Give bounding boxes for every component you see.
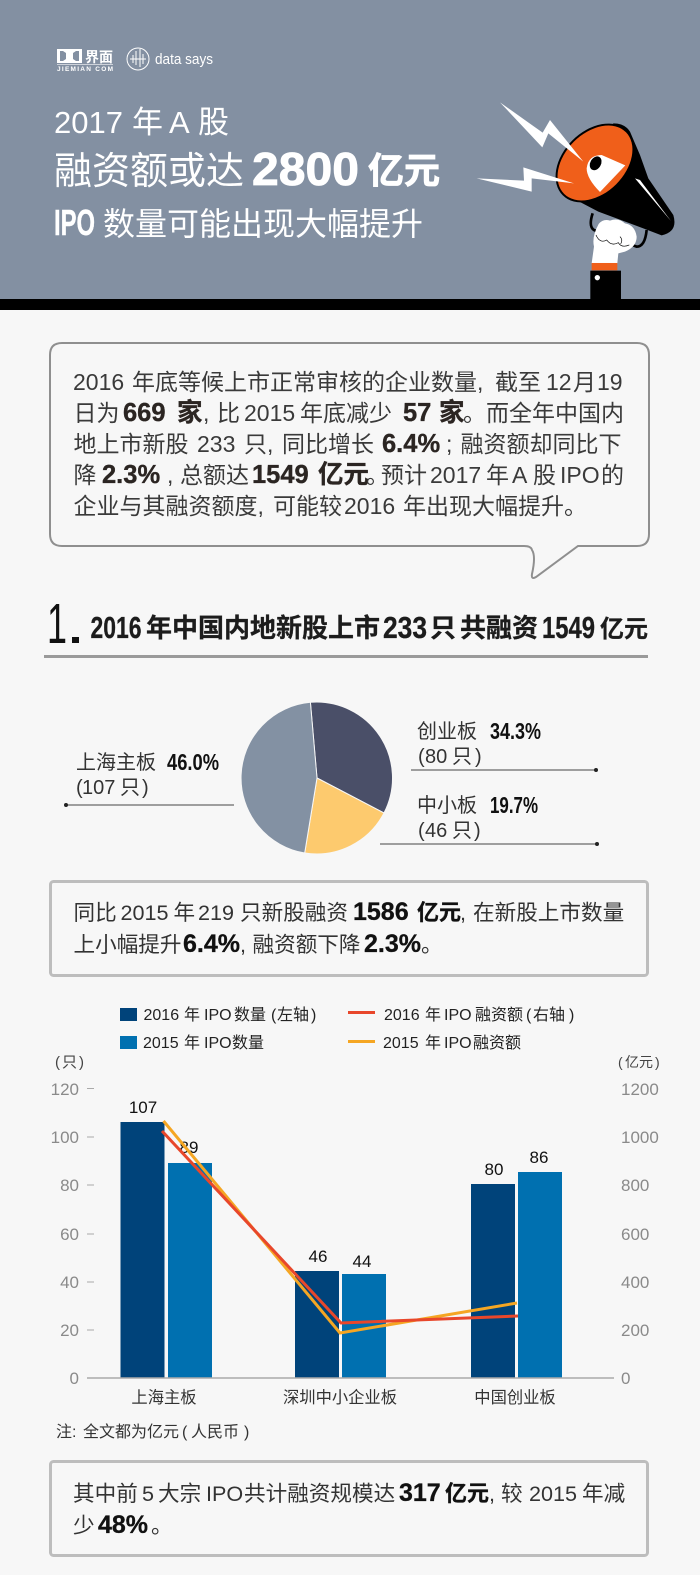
callout: 2015 comparison xyxy=(50,882,648,976)
chart legend: 2016 xyxy=(384,1007,420,1024)
callout: intro speech bubble: , xyxy=(167,462,173,488)
chart legend: IPO xyxy=(204,1035,232,1052)
callout: top 5 IPOs: 317 xyxy=(399,1479,441,1507)
callout: intro speech bubble: 的 xyxy=(601,462,624,488)
right axis: ( xyxy=(618,1054,623,1070)
chart legend: 年 xyxy=(425,1034,441,1052)
callout: intro speech bubble: 股 xyxy=(533,462,556,488)
line: 2016 financing xyxy=(162,1131,518,1323)
callout: intro speech bubble: 12 xyxy=(546,369,572,395)
callout: 2015 comparison: 同比 xyxy=(74,900,117,925)
callout: intro speech bubble: ; xyxy=(446,431,452,457)
callout: 2015 comparison: 219 xyxy=(198,900,234,925)
bar value labels xyxy=(129,1098,548,1271)
callout: intro speech bubble: 家 xyxy=(177,399,203,427)
chart legend: 右轴 xyxy=(533,1006,565,1024)
left axis: 100 xyxy=(51,1128,79,1147)
pie label: 上海主板: 只 xyxy=(120,777,140,799)
right axis: 600 xyxy=(621,1225,649,1244)
callout: intro speech bubble: 截至 xyxy=(495,369,541,395)
bar value labels: 80 xyxy=(485,1160,503,1179)
slice: 上海主板 xyxy=(241,702,317,853)
title: 股 xyxy=(198,105,229,140)
bar value labels: 89 xyxy=(180,1138,198,1157)
logo: data says xyxy=(127,48,213,70)
footnote: ( xyxy=(182,1424,188,1441)
pie label: 创业板: 创业板 xyxy=(417,720,477,743)
left axis: 0 xyxy=(70,1369,79,1388)
category labels xyxy=(131,1389,556,1407)
heading: section 1: 只 xyxy=(430,613,456,643)
chart legend: ( xyxy=(526,1007,532,1024)
callout: intro speech bubble: 年 xyxy=(486,462,509,488)
callout: intro speech bubble: 6.4% xyxy=(382,430,440,458)
header banner xyxy=(0,0,700,310)
callout: 2015 comparison: 2.3% xyxy=(364,930,421,958)
callout: top 5 IPOs: 。 xyxy=(151,1513,173,1538)
callout: top 5 IPOs: 其中前 xyxy=(73,1481,138,1506)
callout: intro speech bubble: 2.3% xyxy=(102,461,160,489)
title: IPO xyxy=(54,202,95,243)
right axis: ) xyxy=(655,1054,660,1070)
left axis: 80 xyxy=(60,1176,79,1195)
callout: intro speech bubble: 亿元 xyxy=(318,461,369,489)
footnote: ) xyxy=(244,1424,249,1441)
icon: lightning bolts xyxy=(477,102,583,192)
title: 融资额或达 xyxy=(54,151,244,193)
line: 2015 financing xyxy=(164,1121,517,1333)
callout: top 5 IPOs: , xyxy=(489,1481,495,1506)
pie label: 中小板: 只 xyxy=(452,820,472,842)
pie label: 创业板: ( xyxy=(418,746,425,768)
chart legend: 数量 xyxy=(232,1034,264,1052)
pie label: 上海主板: ) xyxy=(142,777,149,799)
chart legend: 年 xyxy=(184,1006,200,1024)
pie label: 上海主板 xyxy=(64,749,234,807)
callout: intro speech bubble: IPO xyxy=(560,462,600,488)
heading: section 1: 1 xyxy=(47,592,67,656)
pie label: 创业板 xyxy=(411,718,598,772)
callout: intro speech bubble: 可能较 xyxy=(273,493,342,519)
callout: intro speech bubble: 融资额却同比下 xyxy=(460,431,622,457)
callout: intro speech bubble: 2017 xyxy=(430,462,481,488)
right axis: 0 xyxy=(621,1369,630,1388)
right axis: 1200 xyxy=(621,1080,659,1099)
callout: 2015 comparison: 亿元 xyxy=(417,900,461,925)
callout: intro speech bubble: 比 xyxy=(217,400,240,426)
chart legend: ( xyxy=(271,1007,277,1024)
callout: top 5 IPOs: 大宗 xyxy=(158,1481,201,1506)
pie label: 中小板: 46 xyxy=(425,820,447,842)
chart legend: 2015 xyxy=(143,1035,179,1052)
callout: intro speech bubble: 年底减少 xyxy=(300,400,392,426)
heading: section 1: 2016 xyxy=(90,610,142,645)
bars xyxy=(120,1122,562,1378)
callout: top 5 IPOs xyxy=(50,1462,648,1556)
pie label: 中小板: ( xyxy=(418,820,425,842)
callout: intro speech bubble: 1549 xyxy=(252,461,309,489)
chart legend xyxy=(120,1006,574,1052)
callout: 2015 comparison: 融资额下降 xyxy=(252,932,360,957)
chart legend: ) xyxy=(569,1007,574,1024)
title: 2017 xyxy=(54,105,123,140)
heading: section 1: 233 xyxy=(383,610,427,645)
callout: intro speech bubble: 降 xyxy=(74,462,96,488)
callout: top 5 IPOs: 年减 xyxy=(582,1481,625,1506)
chart legend: IPO xyxy=(204,1007,232,1024)
callout: intro speech bubble: 企业与其融资额度, xyxy=(74,493,264,519)
callout: top 5 IPOs: 亿元 xyxy=(445,1481,489,1506)
right axis: 200 xyxy=(621,1321,649,1340)
right axis: 1000 xyxy=(621,1128,659,1147)
pie label: 中小板: 中小板 xyxy=(417,794,477,817)
callout: intro speech bubble: 年底等候上市正常审核的企业数量, xyxy=(132,369,483,395)
pie label: 创业板: 只 xyxy=(452,746,472,768)
right axis: 400 xyxy=(621,1273,649,1292)
pie chart xyxy=(241,702,393,854)
callout: intro speech bubble: 日为 xyxy=(74,400,120,426)
chart legend: 2016 xyxy=(144,1007,179,1024)
callout: intro speech bubble: 同比增长 xyxy=(282,431,374,457)
left axis xyxy=(51,1054,94,1388)
callout: intro speech bubble: 233 xyxy=(197,431,235,457)
callout: intro speech bubble: 地上市新股 xyxy=(74,431,188,457)
icon: megaphone with fist xyxy=(477,102,674,300)
category labels: 上海主板 xyxy=(131,1389,197,1407)
callout: 2015 comparison: , xyxy=(460,900,466,925)
callout: 2015 comparison: 上小幅提升 xyxy=(74,932,181,957)
callout: top 5 IPOs: 5 xyxy=(142,1481,154,1506)
heading: section 1 xyxy=(44,592,648,658)
left axis: 20 xyxy=(60,1321,79,1340)
heading: section 1: 共融资 xyxy=(460,613,538,643)
title: 数量可能出现大幅提升 xyxy=(103,206,423,242)
callout: 2015 comparison: 。 xyxy=(421,932,443,957)
right axis: 亿元 xyxy=(625,1054,653,1070)
callout: intro speech bubble xyxy=(50,343,649,578)
pie label: 中小板 xyxy=(380,792,599,846)
callout: top 5 IPOs: 共计融资规模达 xyxy=(244,1481,395,1506)
footnote: 注: xyxy=(56,1423,76,1441)
pie label: 中小板: ) xyxy=(474,820,481,842)
pie label: 上海主板: ( xyxy=(76,777,83,799)
left axis: 只 xyxy=(62,1054,77,1071)
callout: 2015 comparison: , xyxy=(240,932,246,957)
heading: section 1: 亿元 xyxy=(600,616,648,643)
title xyxy=(54,105,440,243)
chart legend: 左轴 xyxy=(277,1006,309,1024)
title: 亿元 xyxy=(368,150,440,191)
heading: section 1: 年中国内地新股上市 xyxy=(146,613,380,643)
bar value labels: 107 xyxy=(129,1098,157,1117)
callout: intro speech bubble: 57 xyxy=(403,399,431,427)
chart legend: 年 xyxy=(184,1034,200,1052)
pie label: 上海主板: 上海主板 xyxy=(76,751,156,774)
bar value labels: 44 xyxy=(353,1252,371,1271)
callout: intro speech bubble: 2016 xyxy=(344,493,395,519)
bar value labels: 46 xyxy=(309,1247,327,1266)
pie label: 创业板: 34.3% xyxy=(490,718,541,744)
callout: 2015 comparison: 2015 xyxy=(120,900,169,925)
footnote: 人民币 xyxy=(191,1423,239,1441)
pie label: 上海主板: 107 xyxy=(82,777,115,799)
callout: intro speech bubble: 。 xyxy=(366,462,389,488)
chart legend: 融资额 xyxy=(475,1006,523,1024)
right axis xyxy=(618,1054,660,1388)
right axis: 800 xyxy=(621,1176,649,1195)
chart legend: IPO xyxy=(444,1035,472,1052)
callout: intro speech bubble: 669 xyxy=(123,399,166,427)
category labels: 中国创业板 xyxy=(474,1389,556,1407)
logo: Jiemian: 界面 xyxy=(85,49,113,65)
slice: 创业板 xyxy=(310,702,393,813)
category labels: 深圳中小企业板 xyxy=(283,1389,397,1407)
callout: 2015 comparison: 在新股上市数量 xyxy=(473,900,624,925)
left axis: 60 xyxy=(60,1225,79,1244)
title: A xyxy=(169,105,190,140)
chart legend: 年 xyxy=(425,1006,441,1024)
callout: intro speech bubble: 2016 xyxy=(73,369,124,395)
title: 年 xyxy=(132,105,163,140)
logo: Jiemian: JIEMIAN COM xyxy=(57,66,113,73)
left axis: 120 xyxy=(51,1080,79,1099)
callout: intro speech bubble: 。而全年中国内 xyxy=(463,400,624,426)
callout: 2015 comparison: 年 xyxy=(174,900,195,925)
chart legend: 2015 xyxy=(383,1035,419,1052)
callout: 2015 comparison: 6.4% xyxy=(183,930,240,958)
callout: 2015 comparison: 1586 xyxy=(353,898,409,926)
callout: intro speech bubble: 总额达 xyxy=(180,462,249,488)
callout: intro speech bubble: A xyxy=(512,462,528,488)
callout: intro speech bubble: 19 xyxy=(597,369,623,395)
chart legend: 融资额 xyxy=(473,1034,521,1052)
callout: top 5 IPOs: IPO xyxy=(206,1481,243,1506)
pie label: 创业板: ) xyxy=(475,746,482,768)
callout: top 5 IPOs: 48% xyxy=(98,1511,148,1539)
chart legend: 数量 xyxy=(234,1006,266,1024)
callout: intro speech bubble: , xyxy=(203,400,209,426)
callout: intro speech bubble: 只, xyxy=(244,431,273,457)
callout: top 5 IPOs: 较 xyxy=(501,1481,523,1506)
left axis: 40 xyxy=(60,1273,79,1292)
chart legend: IPO xyxy=(444,1007,472,1024)
callout: top 5 IPOs: 2015 xyxy=(529,1481,577,1506)
chart legend: ) xyxy=(311,1007,316,1024)
slice: 中小板 xyxy=(305,778,384,854)
pie label: 创业板: 80 xyxy=(425,746,447,768)
callout: 2015 comparison: 只新股融资 xyxy=(240,900,348,925)
callout: intro speech bubble: 年出现大幅提升。 xyxy=(403,493,587,519)
footnote: 全文都为亿元 xyxy=(83,1423,179,1441)
callout: top 5 IPOs: 少 xyxy=(73,1513,95,1538)
left axis: ) xyxy=(79,1054,84,1071)
heading: section 1: 1549 xyxy=(542,610,595,645)
callout: intro speech bubble: 2015 xyxy=(244,400,295,426)
title: 2800 xyxy=(252,143,359,195)
pie label: 上海主板: 46.0% xyxy=(167,749,219,775)
chart: IPO count and financing xyxy=(51,1054,660,1407)
left axis: ( xyxy=(55,1054,60,1071)
callout: intro speech bubble: 月 xyxy=(573,369,596,395)
callout: intro speech bubble: 预计 xyxy=(381,462,427,488)
logo: data says: data says xyxy=(155,51,213,68)
pie label: 中小板: 19.7% xyxy=(490,792,538,818)
callout: intro speech bubble: 家 xyxy=(439,399,465,427)
bar value labels: 86 xyxy=(530,1148,548,1167)
logo: Jiemian xyxy=(57,49,113,73)
